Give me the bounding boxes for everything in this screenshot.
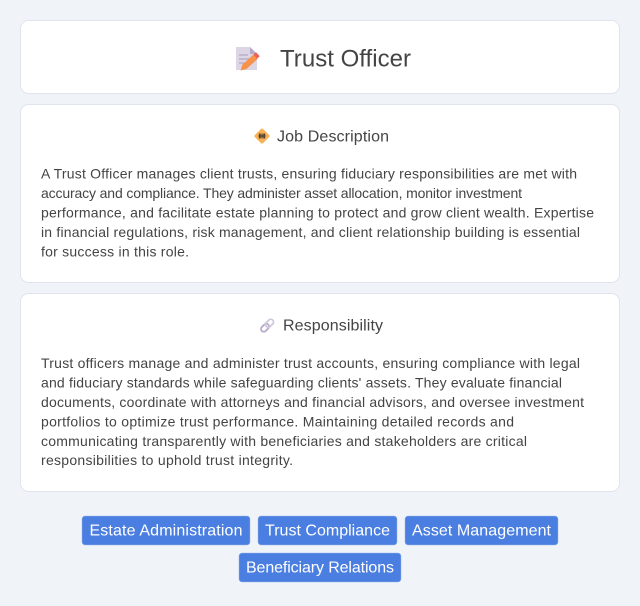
icon: diamond road sign: [254, 128, 270, 144]
text block: job description: performance, and facilitate estate planning to protect and grow client wealth. Expertise: [41, 204, 594, 220]
text block: responsibility: portfolios to optimize trust performance. Maintaining detailed records and: [41, 414, 514, 430]
panel: title card: [20, 20, 620, 94]
tag: estate administration: [82, 516, 250, 545]
tag: beneficiary relations: Beneficiary Relations: [246, 560, 394, 576]
text block: job description: in financial regulations, risk management, and client relationship building is essential: [41, 224, 580, 240]
tag: beneficiary relations: [239, 553, 401, 582]
panel: responsibility: [20, 294, 620, 492]
tag: asset management: [405, 516, 558, 545]
text block: responsibility: and fiduciary standards while safeguarding clients' assets. They evaluate financial: [41, 374, 562, 390]
tag: trust compliance: [258, 516, 397, 545]
text block: responsibility: responsibilities to uphold trust integrity.: [41, 452, 293, 468]
panel: job description: [20, 104, 620, 282]
text block: responsibility: [41, 355, 584, 468]
tag: trust compliance: Trust Compliance: [265, 522, 390, 540]
text block: job description: accuracy and compliance. They administer asset allocation, monitor investment: [41, 185, 522, 201]
text block: job description: A Trust Officer manages client trusts, ensuring fiduciary responsibilities are met with: [41, 166, 577, 182]
text block: responsibility: communicating transparently with beneficiaries and stakeholders are critical: [41, 433, 527, 449]
heading: responsibility: Responsibility: [283, 318, 383, 334]
tag: asset management: Asset Management: [412, 522, 552, 540]
title: Trust Officer: [280, 46, 411, 72]
text block: responsibility: Trust officers manage and administer trust accounts, ensuring compliance with legal: [41, 355, 580, 371]
icon: chain link: [260, 318, 275, 333]
text block: job description: for success in this role.: [41, 244, 189, 260]
icon: document with pencil: [236, 47, 260, 70]
tag: estate administration: Estate Administration: [90, 522, 242, 540]
text block: responsibility: documents, coordinate with attorneys and financial advisors, and oversee investment: [41, 394, 584, 410]
text block: job description: [41, 166, 594, 260]
heading: job description: Job Description: [277, 128, 389, 146]
